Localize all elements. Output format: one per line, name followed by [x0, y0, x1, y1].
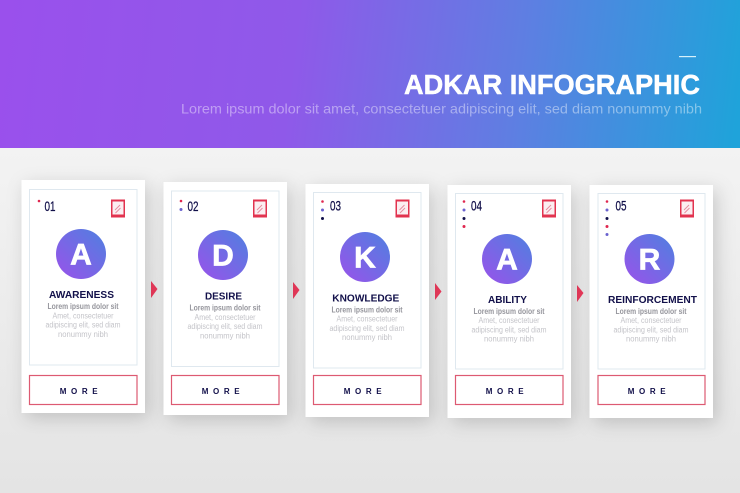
body text: nonummy nibh — [58, 330, 108, 339]
heading: DESIRE — [205, 290, 242, 302]
body text: Amet, consectetuer — [52, 312, 114, 320]
more button — [172, 376, 279, 404]
body text: Amet, consectetuer — [478, 316, 540, 325]
header banner — [0, 0, 740, 148]
step number: 03 — [330, 198, 341, 214]
body text: Amet, consectetuer — [620, 316, 682, 325]
letter badge: A — [70, 238, 92, 272]
letter badge: R — [639, 244, 661, 276]
heading: KNOWLEDGE — [332, 292, 399, 304]
panel: awareness — [22, 180, 145, 413]
icon: tablet — [396, 200, 410, 218]
arrow 3 — [435, 283, 442, 300]
title accent dash — [679, 56, 696, 57]
body text — [188, 304, 263, 340]
body text — [330, 306, 405, 342]
body text: Lorem ipsum dolor sit — [616, 307, 687, 316]
body text: adipiscing elit, sed diam — [330, 324, 405, 333]
letter badge — [340, 232, 390, 282]
icon: tablet — [253, 200, 267, 218]
more button: MORE — [344, 387, 386, 396]
panel: reinforcement — [590, 185, 713, 418]
more button: MORE — [486, 387, 528, 396]
letter badge: A — [496, 244, 518, 276]
panel: knowledge — [306, 184, 429, 417]
arrow 4 — [577, 285, 584, 302]
heading: AWARENESS — [49, 289, 114, 301]
letter badge: K — [354, 242, 376, 274]
letter badge: D — [212, 240, 234, 272]
title: ADKAR INFOGRAPHIC — [404, 69, 700, 100]
icon: tablet — [111, 200, 125, 218]
step number: 05 — [616, 198, 627, 214]
letter badge — [482, 234, 532, 284]
body text: nonummy nibh — [200, 332, 250, 340]
more button: MORE — [628, 387, 670, 396]
panel: desire — [164, 182, 287, 415]
icon: tablet — [680, 200, 694, 218]
more button — [314, 376, 421, 404]
more button: MORE — [60, 387, 102, 396]
letter badge — [198, 230, 248, 280]
step dots — [321, 200, 324, 220]
background — [0, 148, 740, 493]
heading: ABILITY — [488, 294, 527, 306]
body text: adipiscing elit, sed diam — [46, 320, 121, 330]
step dots — [462, 200, 466, 228]
body text: Amet, consectetuer — [194, 313, 256, 322]
body text: adipiscing elit, sed diam — [188, 322, 263, 331]
panel: ability — [448, 185, 571, 418]
step number: 01 — [44, 198, 56, 214]
body text — [46, 302, 121, 339]
body text: Lorem ipsum dolor sit — [474, 307, 545, 316]
subtitle: Lorem ipsum dolor sit amet, consectetuer adipiscing elit, sed diam nonummy nibh — [181, 100, 702, 116]
step dots — [38, 200, 40, 202]
letter badge — [624, 234, 674, 284]
body text: nonummy nibh — [626, 334, 676, 344]
body text — [472, 307, 547, 344]
more button: MORE — [202, 387, 244, 396]
body text: adipiscing elit, sed diam — [614, 326, 689, 334]
body text: nonummy nibh — [342, 333, 392, 342]
arrow 2 — [293, 282, 300, 299]
body text: Lorem ipsum dolor sit — [48, 302, 119, 311]
more button — [598, 376, 705, 404]
letter badge — [56, 229, 106, 279]
body text: Amet, consectetuer — [336, 314, 398, 324]
icon: tablet — [542, 200, 556, 218]
step number: 02 — [188, 198, 199, 214]
step number: 04 — [471, 198, 482, 214]
step dots — [180, 200, 182, 211]
arrow 1 — [151, 281, 158, 298]
body text — [614, 307, 689, 344]
body text: Lorem ipsum dolor sit — [332, 306, 403, 314]
heading: REINFORCEMENT — [608, 294, 698, 306]
body text: adipiscing elit, sed diam — [472, 326, 547, 334]
body text: nonummy nibh — [484, 334, 534, 344]
more button — [30, 376, 137, 404]
step dots — [606, 200, 608, 236]
body text: Lorem ipsum dolor sit — [190, 304, 261, 312]
more button — [456, 376, 563, 404]
